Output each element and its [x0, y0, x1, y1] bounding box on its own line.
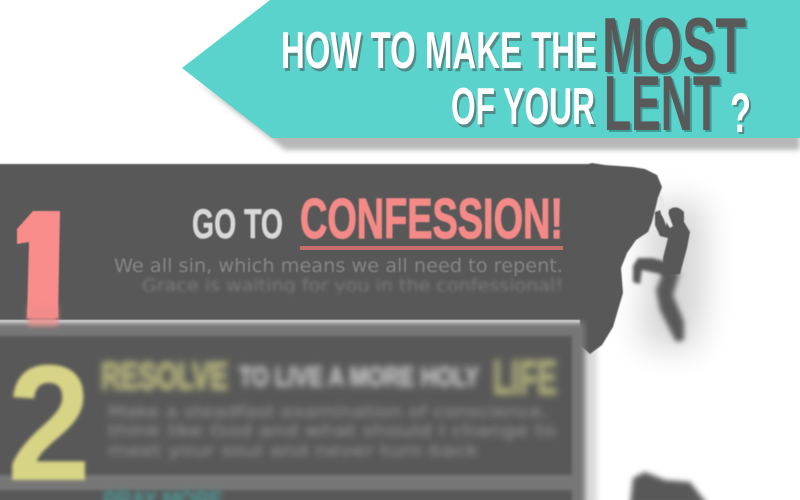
- heading 2: [101, 352, 557, 405]
- climber raised arm: [658, 195, 673, 228]
- title line 1: [281, 22, 599, 83]
- body text 2: Make a steadfast examination of conscience,: [108, 402, 548, 421]
- panel 1 background with rock overhang: [0, 163, 662, 354]
- title line 1: HOW TO MAKE THE: [281, 22, 597, 80]
- title emphasis: lent: [604, 59, 722, 149]
- heading: confession: CONFESSION!: [300, 187, 563, 251]
- panel 3 inner: [0, 490, 572, 500]
- climber soft shadow: [640, 200, 705, 350]
- heading 2: TO LIVE A MORE HOLY: [239, 361, 479, 392]
- body line 1: We all sin, which means we all need to repent.: [114, 255, 563, 277]
- heading 2: RESOLVE: [101, 356, 228, 398]
- icon: climber silhouette: [633, 195, 690, 342]
- heading 2: LIFE: [493, 352, 557, 405]
- lower rock silhouette: [630, 472, 708, 500]
- climber bent leg: [633, 258, 668, 284]
- title line 2: [451, 78, 597, 139]
- body line 2: Grace is waiting for you in the confessional!: [142, 275, 563, 297]
- number 1: [17, 211, 60, 318]
- title question mark: [730, 81, 753, 146]
- heading underline: [300, 246, 563, 250]
- body text 2: meet your soul and never turn back: [108, 441, 479, 460]
- title line 2: OF YOUR: [453, 81, 597, 139]
- title question mark: ?: [732, 83, 753, 146]
- heading: go to: GO TO: [192, 200, 283, 247]
- title line 2: OF YOUR: [451, 78, 595, 136]
- panel 2 inner: [0, 336, 572, 475]
- title banner: [182, 0, 800, 149]
- fade over body line 2: [100, 292, 580, 308]
- blurred base of number 1: [28, 306, 58, 326]
- panel 2 frame: [0, 322, 585, 500]
- banner shadow: [195, 80, 800, 150]
- climber lower leg: [656, 270, 684, 342]
- body text 2: [108, 402, 556, 460]
- panel 2 outer glow: [575, 345, 597, 500]
- title line 1: HOW TO MAKE THE: [283, 25, 599, 83]
- climber head and torso: [655, 207, 690, 276]
- title question mark: ?: [730, 81, 751, 144]
- body text 2: think like God and what should I change to: [108, 421, 556, 440]
